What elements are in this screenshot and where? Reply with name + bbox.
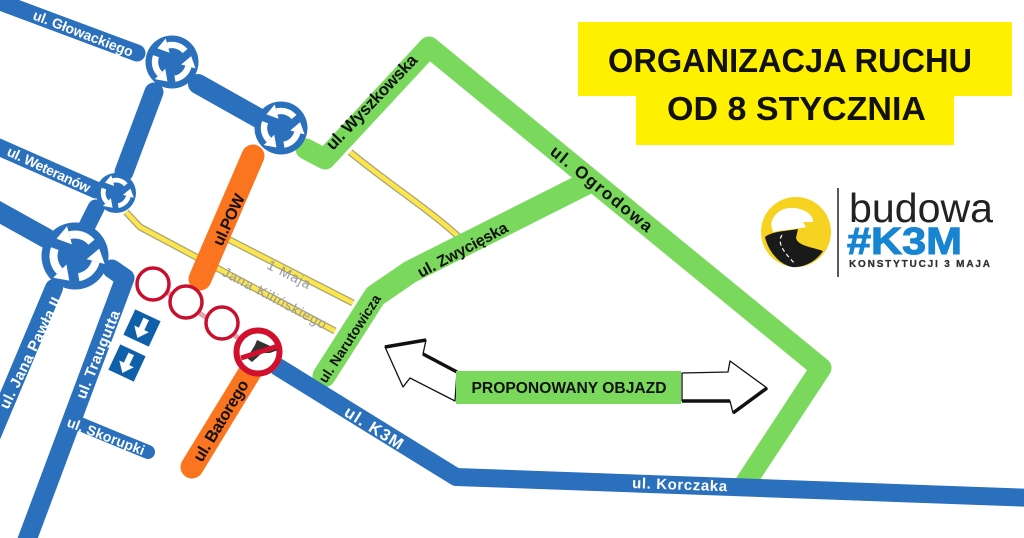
street labels on blue roads: ul. Głowackiego [31, 7, 136, 60]
street labels on green and orange roads: ul.POW [210, 191, 249, 249]
street labels on blue roads: ul. Korczaka [632, 475, 728, 495]
roundabouts [41, 36, 309, 290]
street name: 1 Maja: 1 Maja [265, 256, 314, 292]
street labels on blue roads: ul. Traugutta [73, 307, 124, 401]
yellow local streets [126, 152, 460, 331]
orange closed streets [192, 156, 253, 467]
title: ORGANIZACJA RUCHU [608, 43, 972, 80]
street labels on green and orange roads: ul. Zwycięska [415, 220, 511, 282]
street labels on blue roads: ul. K3M [341, 403, 406, 453]
title [578, 22, 1012, 145]
detour arrow, right [682, 361, 767, 413]
title: OD 8 STYCZNIA [667, 91, 926, 128]
green detour route [306, 47, 821, 482]
logo: budowa #K3M: #K3M [847, 221, 962, 263]
logo icon: road in yellow circle [761, 197, 831, 267]
street labels on blue roads: ul. Skorupki [65, 414, 147, 458]
street labels on green and orange roads: ul. Wyszkowska [322, 50, 422, 154]
logo: budowa #K3M [761, 185, 993, 277]
detour arrow, left [385, 340, 457, 401]
logo: budowa #K3M: budowa [849, 185, 993, 231]
one-way signs [108, 309, 161, 382]
detour label [456, 371, 681, 404]
street labels on blue roads [0, 7, 728, 495]
detour label: PROPONOWANY OBJAZD [472, 380, 666, 397]
street labels on green and orange roads: ul. Narutowicza [315, 291, 384, 386]
logo: budowa #K3M: KONSTYTUCJI 3 MAJA [849, 259, 990, 270]
street labels on blue roads: ul. Weteranów [5, 143, 93, 196]
street labels on green and orange roads: ul. Ogrodowa [546, 142, 657, 236]
street labels on green and orange roads [190, 50, 657, 465]
no turn sign [234, 328, 282, 376]
street labels on green and orange roads: ul. Batorego [190, 377, 253, 465]
street name: Jana Kilińskiego: Jana Kilińskiego [220, 264, 330, 332]
road closure signs [137, 268, 259, 351]
